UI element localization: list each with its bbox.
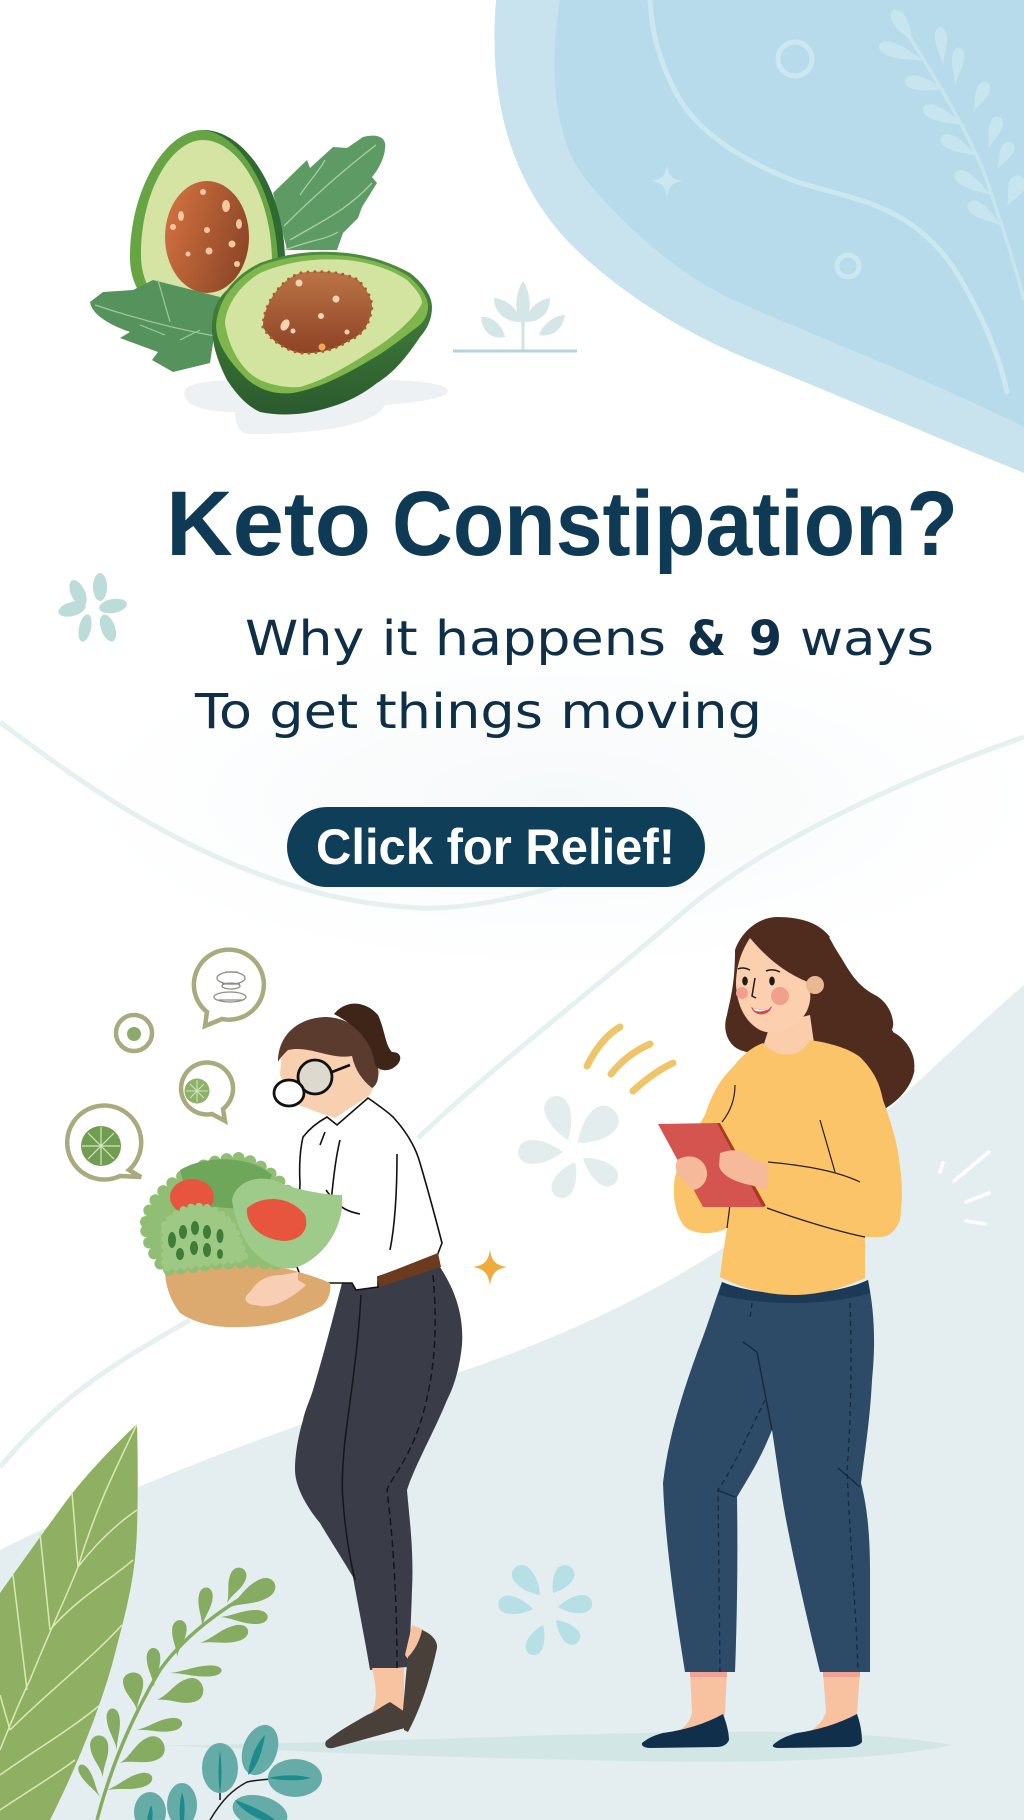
teal leaves (134, 1720, 322, 1820)
seed front (263, 272, 372, 353)
hair back (725, 917, 915, 1110)
belt (377, 1253, 441, 1287)
title: Constipation? (392, 473, 958, 575)
ankle (372, 1668, 404, 1712)
face (736, 938, 810, 1032)
icon: flower top left (57, 573, 128, 644)
neck (762, 1015, 815, 1058)
lettuce leaf wrap (232, 1179, 342, 1268)
trousers (663, 1280, 874, 1672)
seed back (165, 181, 249, 293)
speech bubbles (67, 950, 264, 1180)
background hill (0, 985, 1024, 1820)
big green leaf bottom left (0, 1424, 138, 1820)
illustration: avocado halves with leaves (90, 130, 448, 434)
person: right woman with tablet (642, 917, 915, 1748)
hair (278, 1017, 378, 1088)
tablet (658, 1123, 765, 1207)
button: Click for Relief: Click for Relief! (316, 819, 675, 875)
subtitle: & (687, 611, 726, 667)
icon: gold sparkle (473, 1250, 507, 1285)
icon: white sparks (940, 1152, 989, 1224)
salad (146, 1158, 342, 1270)
subtitle: 9 (749, 611, 782, 667)
icon: pale branch top right (877, 7, 1024, 300)
background wave lines (0, 722, 1024, 1467)
subtitle (194, 611, 934, 740)
subtitle: Why it happens (245, 611, 666, 667)
shoes (642, 1714, 729, 1748)
shoe: front (325, 1702, 405, 1748)
ponytail (334, 1004, 400, 1070)
bubble: large (67, 1106, 141, 1180)
head: face and neck (280, 1030, 385, 1118)
basket (165, 1250, 330, 1327)
bubble: top (194, 950, 264, 1026)
green sprig (76, 1565, 279, 1820)
button: Click for Relief (287, 807, 705, 887)
icon: small plant (453, 281, 577, 352)
bubble: small (116, 1015, 152, 1051)
ankles (668, 1672, 860, 1740)
icon: pale blue flower bottom (497, 1561, 593, 1658)
glasses (274, 1060, 350, 1106)
icon: yellow motion arcs (587, 1027, 673, 1091)
leaf: left (90, 280, 220, 372)
icon: pale flower centre (518, 1092, 625, 1202)
title (166, 473, 958, 575)
bubble: medium (181, 1062, 233, 1121)
person: left woman with salad bowl (146, 1004, 462, 1748)
shoe: back (403, 1630, 437, 1732)
subtitle: ways (800, 611, 934, 667)
leaf: upper right (273, 136, 385, 250)
shadow (184, 380, 448, 434)
strawberry small (170, 1179, 214, 1215)
strawberry large (247, 1199, 306, 1241)
hands (676, 1156, 707, 1190)
avocado back half (130, 130, 285, 340)
sweater (674, 1040, 902, 1295)
background blob: top right (494, 0, 1024, 473)
avocado front half (212, 252, 432, 414)
hand (245, 1272, 306, 1306)
subtitle: To get things moving (194, 684, 762, 740)
title: Keto (166, 473, 371, 575)
legs and trousers (295, 1267, 462, 1670)
shirt (297, 1098, 442, 1290)
ground shadow (160, 1732, 952, 1762)
